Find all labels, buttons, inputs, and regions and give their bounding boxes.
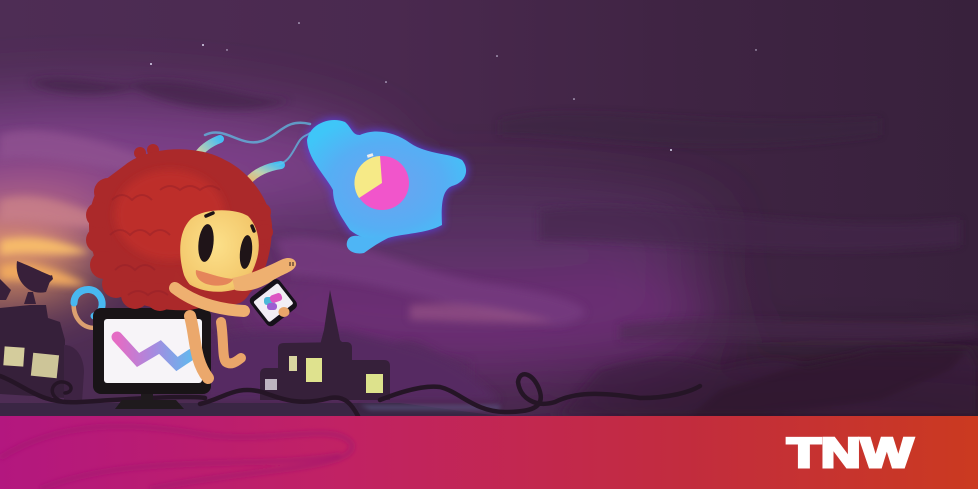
- cables: [0, 374, 700, 416]
- eye right: [238, 234, 254, 270]
- tail: [74, 289, 102, 328]
- leg front: [190, 316, 208, 378]
- sky colour masses: [0, 100, 978, 460]
- leg back: [221, 322, 241, 363]
- phone chart icon: [264, 292, 283, 310]
- antenna right: [248, 165, 281, 181]
- bubble body: [307, 120, 466, 240]
- thought wisps: [205, 123, 310, 165]
- building arch: [64, 345, 84, 402]
- water strip: [0, 403, 500, 416]
- right window 1: [289, 356, 297, 371]
- bubble glow: [307, 120, 466, 240]
- antenna left: [193, 139, 220, 173]
- right window 3: [366, 374, 383, 393]
- right buildings: [260, 342, 390, 400]
- eyebrow left: [206, 213, 213, 216]
- monitor line chart: [117, 337, 192, 364]
- beard: [174, 270, 252, 306]
- clouds: [0, 78, 978, 342]
- left window 1: [3, 346, 25, 367]
- pie chart: [354, 153, 409, 210]
- satellite dishes: [0, 261, 53, 304]
- thought bubble: [205, 120, 466, 253]
- purple hills behind town: [205, 330, 500, 400]
- radio tower: [320, 290, 345, 345]
- right window 2: [306, 358, 322, 382]
- hair scales: [110, 186, 220, 295]
- bottom gradient band: [0, 416, 978, 489]
- character: [74, 139, 299, 409]
- hair centre light: [115, 170, 225, 260]
- monitor stand: [115, 393, 184, 409]
- stars: [150, 22, 757, 151]
- face: [180, 210, 259, 297]
- monitor: [93, 308, 211, 409]
- arm: [175, 288, 244, 311]
- reflected cables in band: [0, 426, 352, 489]
- right town silhouette: [260, 290, 390, 400]
- distant mountains: [388, 341, 978, 416]
- left window 2: [31, 353, 59, 378]
- monitor screen: [104, 319, 202, 383]
- nostrils: [290, 262, 293, 266]
- TNW logo: TNW: [787, 429, 913, 476]
- bubble drip: [347, 236, 388, 253]
- nose: [232, 258, 296, 291]
- hair: [86, 144, 273, 311]
- hand: [278, 307, 290, 317]
- eye left: [197, 223, 215, 263]
- mouth: [196, 270, 233, 286]
- eyebrow right: [252, 226, 254, 231]
- left building: [0, 305, 65, 398]
- phone: [248, 277, 299, 328]
- left town silhouette: [0, 261, 84, 402]
- right window 4: [265, 379, 277, 390]
- water highlight: [360, 405, 500, 410]
- monitor frame: [93, 308, 211, 394]
